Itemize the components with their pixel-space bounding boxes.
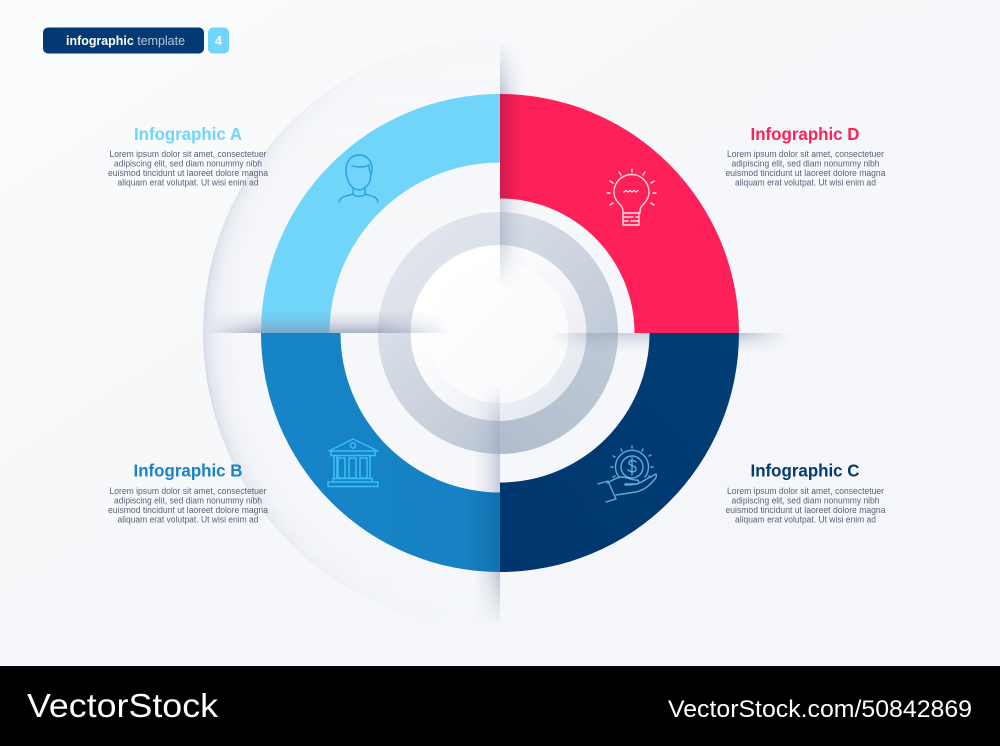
text block C: Lorem ipsum dolor sit amet, consectetuer xyxy=(727,486,884,496)
ring shadow top xyxy=(500,198,520,282)
shadow on red segment xyxy=(500,94,516,200)
segment D xyxy=(500,94,739,333)
segment C xyxy=(500,333,739,572)
grey ring xyxy=(378,212,618,454)
icon: bank building xyxy=(328,439,378,486)
text block D: euismod tincidunt ut laoreet dolore magna xyxy=(726,168,886,178)
text block B xyxy=(108,460,268,524)
segment A xyxy=(261,94,500,333)
footer bar xyxy=(0,666,1000,746)
hub disc xyxy=(410,245,586,421)
icon: person xyxy=(339,155,378,202)
text block D: aliquam erat volutpat. Ut wisi enim ad xyxy=(735,178,876,188)
donut chart xyxy=(261,94,739,572)
top shadow strip xyxy=(500,48,520,94)
text block A: aliquam erat volutpat. Ut wisi enim ad xyxy=(118,178,259,188)
text block C: adipiscing elit, sed diam nonummy nibh xyxy=(732,496,880,506)
icon: light bulb xyxy=(607,169,656,225)
text block D xyxy=(726,124,886,188)
text block B: euismod tincidunt ut laoreet dolore magna xyxy=(108,505,268,515)
heading D: Infographic D xyxy=(750,124,860,144)
text block C xyxy=(726,460,886,524)
left horizontal shadow xyxy=(212,314,442,333)
icon: hand with coin xyxy=(598,446,656,502)
text block B: Lorem ipsum dolor sit amet, consectetuer xyxy=(110,486,267,496)
heading C: Infographic C xyxy=(750,460,860,480)
text block D: Lorem ipsum dolor sit amet, consectetuer xyxy=(727,149,884,159)
heading A: Infographic A xyxy=(134,124,242,144)
step badge xyxy=(208,28,229,54)
step badge: 4 xyxy=(215,34,222,48)
header pill xyxy=(43,28,204,54)
ring shadow right xyxy=(558,333,650,348)
header label: infographic template xyxy=(66,34,185,48)
text block C: aliquam erat volutpat. Ut wisi enim ad xyxy=(735,514,876,524)
footer url: VectorStock.com/50842869 xyxy=(668,696,972,723)
text block A: Lorem ipsum dolor sit amet, consectetuer xyxy=(110,149,267,159)
heading B: Infographic B xyxy=(134,460,242,480)
text block A: euismod tincidunt ut laoreet dolore magna xyxy=(108,168,268,178)
footer logo: VectorStock xyxy=(27,687,219,724)
text block A: adipiscing elit, sed diam nonummy nibh xyxy=(114,158,262,168)
outer shadow disc xyxy=(203,84,338,574)
text block B: aliquam erat volutpat. Ut wisi enim ad xyxy=(118,514,259,524)
hub inner disc xyxy=(428,263,568,403)
text block D: adipiscing elit, sed diam nonummy nibh xyxy=(732,158,880,168)
ring shadow bottom xyxy=(480,392,500,492)
text block C: euismod tincidunt ut laoreet dolore magna xyxy=(726,505,886,515)
text block A xyxy=(108,124,268,188)
segment B xyxy=(261,333,500,572)
bottom shadow strip xyxy=(479,572,500,618)
text block B: adipiscing elit, sed diam nonummy nibh xyxy=(114,496,262,506)
right shadow strip xyxy=(739,333,783,350)
